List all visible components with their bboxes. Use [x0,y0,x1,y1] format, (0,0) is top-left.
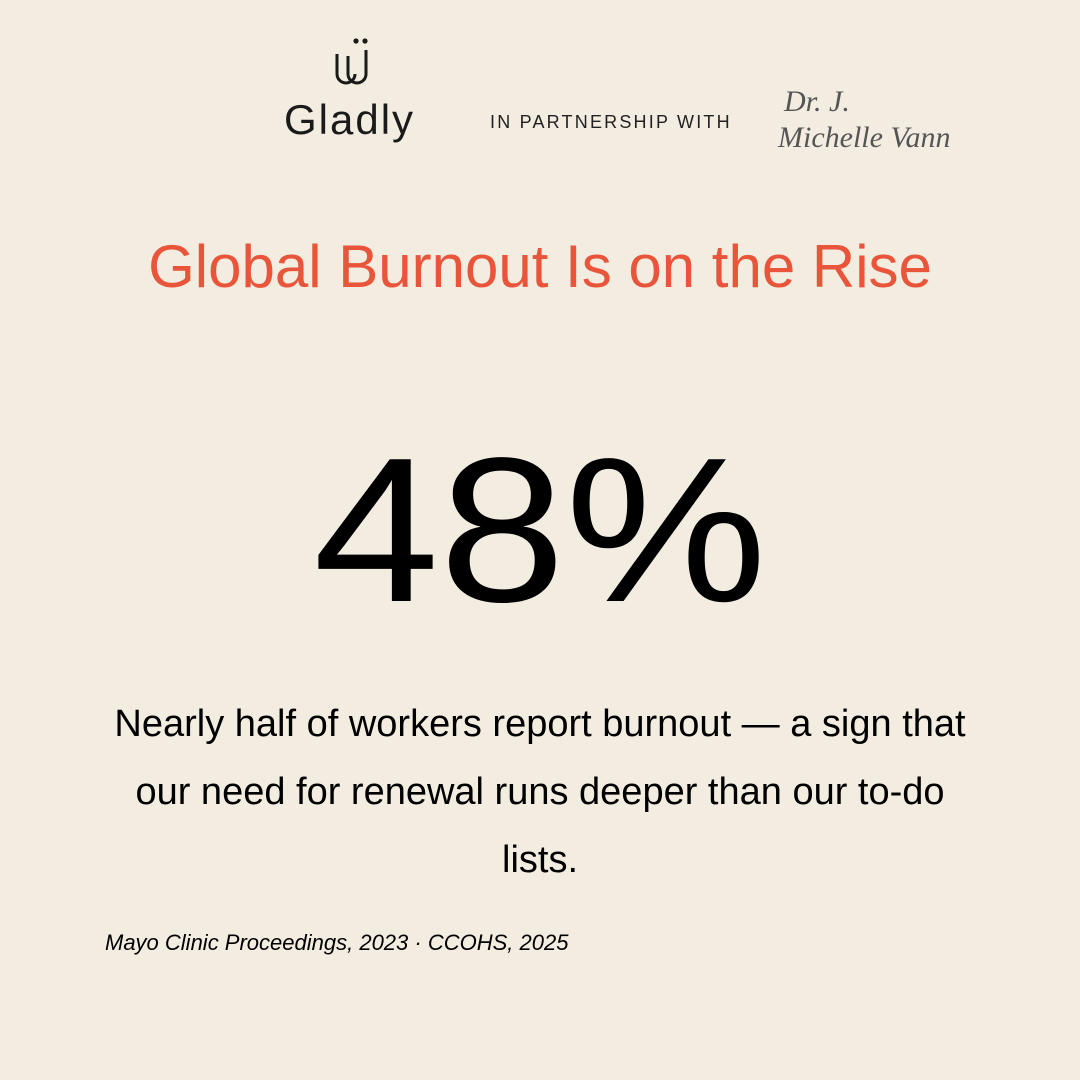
logo text: Gladly [284,96,415,143]
body text: our need for renewal runs deeper than our to-do [135,771,945,813]
body text: Nearly half of workers report burnout — a sign that [114,703,966,745]
icon: Gladly mark [336,38,368,84]
signature: Dr. J. Michelle Vann: Dr. J. [784,85,850,118]
body text: lists. [502,839,578,881]
citation: Mayo Clinic Proceedings, 2023 · CCOHS, 2025 [105,930,568,955]
signature: Dr. J. Michelle Vann [778,85,950,154]
signature: Dr. J. Michelle Vann: Michelle Vann [778,121,950,154]
title: Global Burnout Is on the Rise [148,233,932,300]
big stat: 48% [313,415,767,645]
logo: Gladly [284,38,415,143]
body text [114,703,966,881]
partnership text: IN PARTNERSHIP WITH [490,112,732,132]
